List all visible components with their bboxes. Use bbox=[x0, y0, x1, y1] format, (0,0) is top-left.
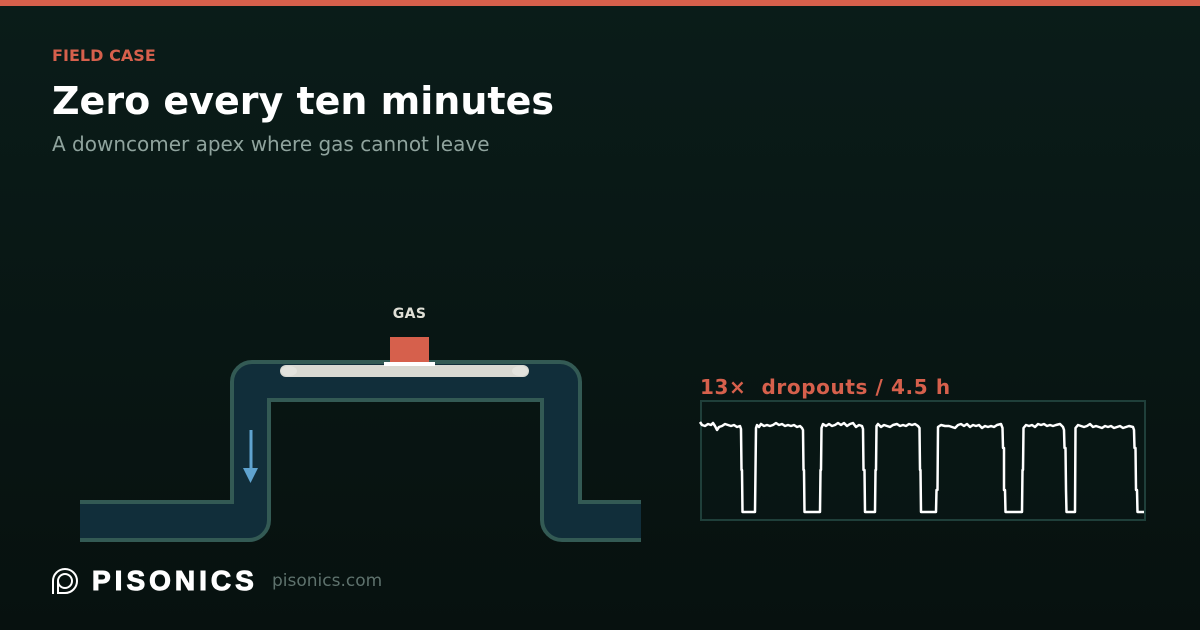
arrow: flow downward bbox=[243, 430, 258, 483]
logo mark bbox=[53, 569, 77, 594]
eyebrow: field case: FIELD CASE bbox=[52, 46, 156, 65]
vent block bbox=[384, 337, 435, 366]
top accent bar bbox=[0, 0, 1200, 6]
gas pocket bbox=[280, 365, 529, 377]
wordmark: PISONICS bbox=[92, 565, 258, 596]
gas label: GAS bbox=[393, 306, 426, 322]
website: pisonics.com bbox=[272, 571, 382, 591]
dropout label: 13× dropouts / 4.5 h bbox=[700, 375, 951, 399]
pipe bbox=[80, 362, 641, 540]
signal chart bbox=[700, 401, 1145, 520]
title: Zero every ten minutes bbox=[52, 79, 554, 123]
subtitle: A downcomer apex where gas cannot leave bbox=[52, 132, 490, 156]
